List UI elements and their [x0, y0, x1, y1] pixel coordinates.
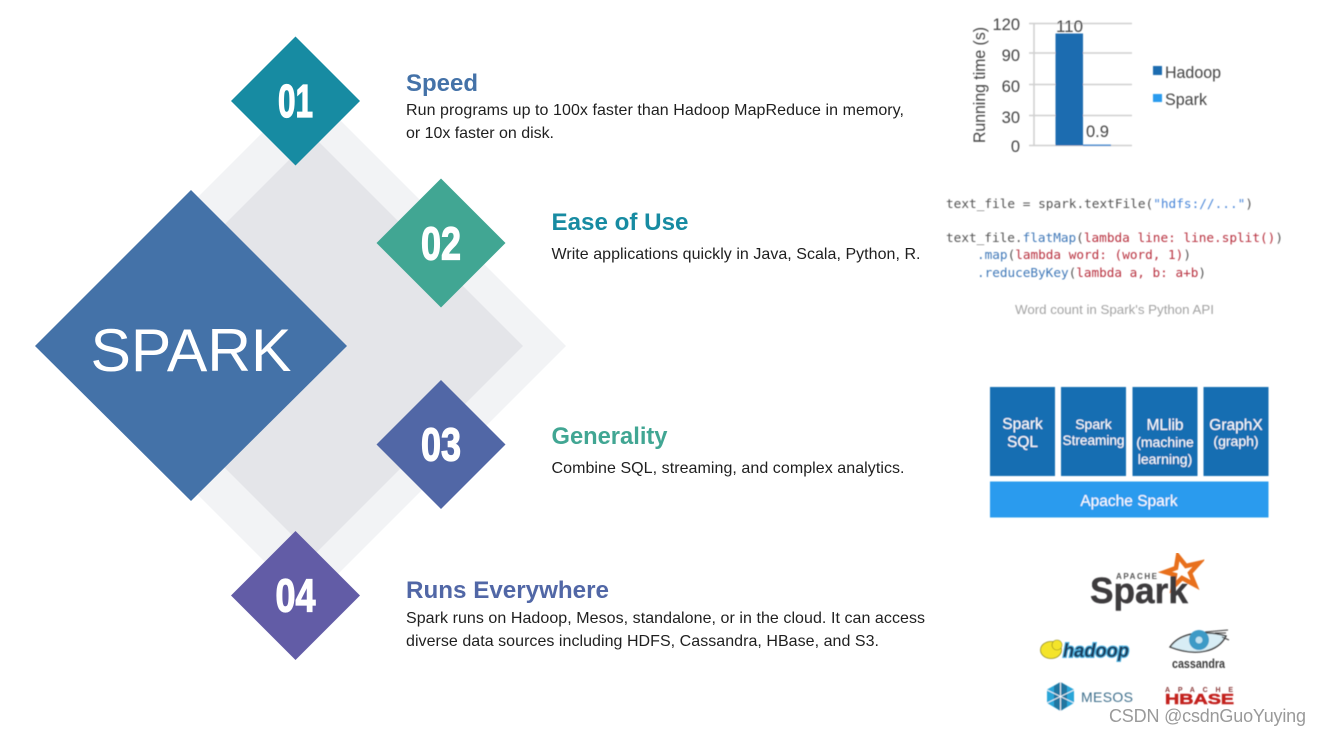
- logo: HBase: [1165, 687, 1234, 708]
- bar chart: running time: Running time (s): [971, 27, 989, 143]
- module: MLlib: MLlib: [1146, 417, 1184, 434]
- logo: Apache Spark: [1090, 556, 1199, 611]
- badge 04: 04: [276, 570, 316, 622]
- bar chart: running time: 90: [1002, 47, 1020, 65]
- module: MLlib: (machine: [1136, 434, 1194, 450]
- module: Spark Streaming: Streaming: [1062, 432, 1124, 448]
- badge 01: [231, 36, 360, 166]
- module: Spark Streaming: Spark: [1075, 416, 1113, 432]
- stack diagram: [990, 387, 1268, 518]
- badge 02: [376, 178, 506, 308]
- text block: Ease of Use: Write applications quickly in Java, Scala, Python, R.: [552, 246, 920, 263]
- badge 04: [231, 531, 360, 660]
- bar chart: running time: 30: [1002, 109, 1020, 127]
- background diamond: light: [49, 88, 566, 604]
- central diamond: SPARK: SPARK: [90, 317, 292, 384]
- text block: Speed: Speed: [406, 70, 478, 97]
- module: Apache Spark: Apache Spark: [1080, 493, 1178, 510]
- bar chart: running time: 0.9: [1086, 123, 1109, 141]
- module: MLlib: [1132, 387, 1198, 476]
- text block: Ease of Use: [552, 209, 920, 263]
- logo: Cassandra: cassandra: [1172, 657, 1226, 671]
- text block: Runs Everywhere: [406, 577, 925, 650]
- text block: Generality: Generality: [552, 423, 668, 450]
- module: Apache Spark: [990, 482, 1268, 518]
- chart legend: Hadoop: [1165, 64, 1221, 82]
- logo: HBase: HBASE: [1165, 691, 1234, 708]
- text block: Ease of Use: Ease of Use: [552, 209, 688, 236]
- module: GraphX: (graph): [1213, 433, 1259, 449]
- module: Spark Streaming: [1061, 387, 1126, 476]
- logo: HBase: APACHE: [1165, 687, 1233, 694]
- logo: Cassandra: [1170, 630, 1229, 671]
- text block: Runs Everywhere: Runs Everywhere: [406, 577, 609, 604]
- badge 01: 01: [278, 75, 313, 127]
- chart legend: Spark: [1165, 91, 1208, 109]
- bar chart: running time: [971, 16, 1132, 156]
- code sample: .reduceByKey(lambda a, b: a+b): [977, 265, 1206, 280]
- module: Spark SQL: [990, 387, 1055, 476]
- badge 03: 03: [421, 418, 461, 470]
- badge 02: 02: [421, 218, 461, 270]
- text block: Speed: [406, 70, 904, 142]
- logo: Apache Spark: Spark: [1090, 570, 1189, 611]
- text block: Generality: Combine SQL, streaming, and complex analytics.: [552, 460, 904, 477]
- module: GraphX: GraphX: [1209, 417, 1263, 434]
- module: Spark SQL: Spark: [1002, 416, 1043, 433]
- bar chart: running time: 0: [1011, 138, 1020, 156]
- logo: Mesos: [1047, 682, 1133, 711]
- text block: Generality: [552, 423, 904, 477]
- logo: Hadoop: hadoop: [1063, 641, 1129, 662]
- text block: Speed: or 10x faster on disk.: [406, 125, 554, 142]
- text block: Runs Everywhere: Spark runs on Hadoop, Mesos, standalone, or in the cloud. It can access: [406, 610, 925, 627]
- text block: Speed: Run programs up to 100x faster than Hadoop MapReduce in memory,: [406, 102, 904, 119]
- watermark: CSDN @csdnGuoYuying: [1109, 706, 1306, 726]
- code sample: text_file.flatMap(lambda line: line.split()): [946, 230, 1283, 245]
- chart legend: [1153, 64, 1221, 109]
- logo: Hadoop: [1040, 640, 1129, 662]
- logo: Mesos: MESOS: [1081, 689, 1133, 705]
- background diamond: mid: [103, 136, 523, 556]
- code sample: [946, 196, 1283, 280]
- badge 03: [376, 380, 506, 509]
- central diamond: SPARK: [35, 190, 347, 501]
- text block: Runs Everywhere: diverse data sources including HDFS, Cassandra, HBase, and S3.: [406, 633, 879, 650]
- module: Spark SQL: SQL: [1007, 434, 1038, 451]
- module: MLlib: learning): [1138, 451, 1192, 467]
- code caption: Word count in Spark's Python API: [1015, 302, 1214, 317]
- module: GraphX: [1204, 387, 1268, 476]
- bar chart: running time: 120: [992, 16, 1020, 34]
- code sample: .map(lambda word: (word, 1)): [977, 247, 1191, 262]
- code sample: text_file = spark.textFile("hdfs://..."): [946, 196, 1253, 211]
- bar chart: running time: 110: [1056, 18, 1083, 36]
- logo: Apache Spark: APACHE: [1116, 572, 1158, 581]
- bar chart: running time: 60: [1002, 78, 1020, 96]
